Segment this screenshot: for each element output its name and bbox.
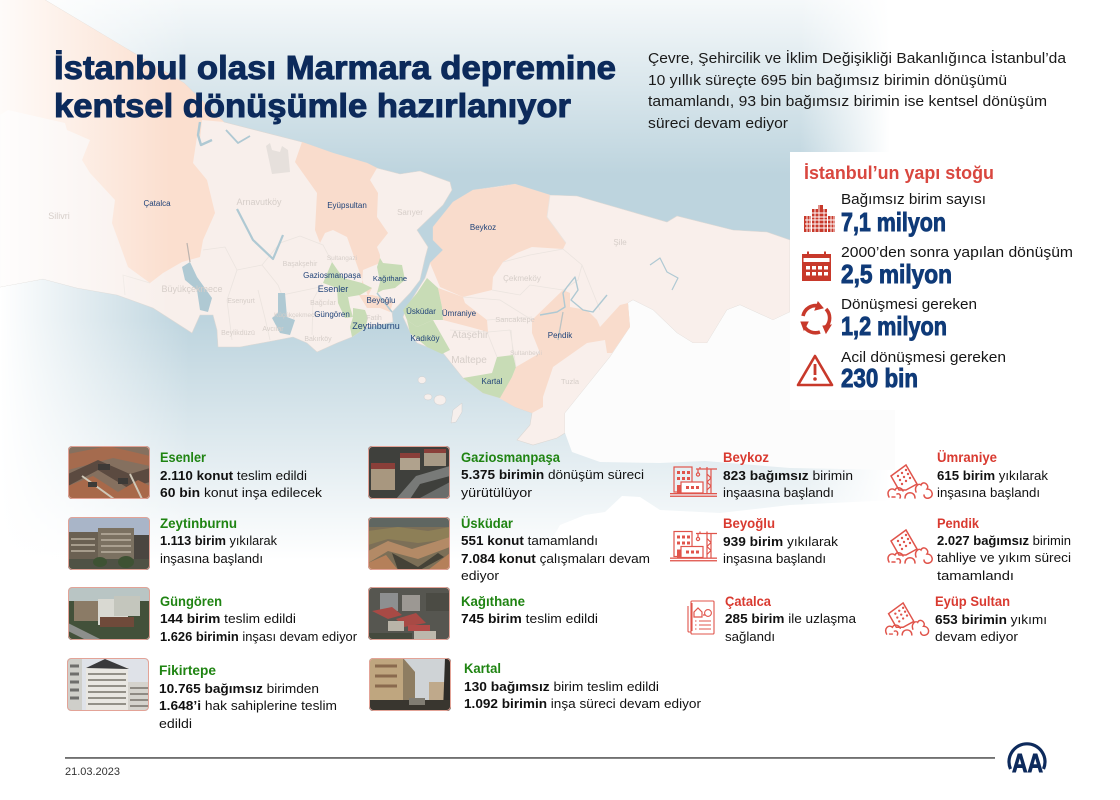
map: grey district labels: Sultangazi bbox=[327, 255, 357, 262]
map: Terkos silhouette bbox=[266, 143, 290, 174]
text: Beyoğlu: 939 birim yıkılarak bbox=[723, 534, 839, 549]
text: Kartal: 1.092 birimin inşa süreci devam ediyor bbox=[464, 696, 702, 711]
map: lakes and water bbox=[182, 262, 462, 423]
text: Kağıthane: Kağıthane bbox=[461, 594, 525, 609]
text: Fikirtepe: Fikirtepe bbox=[159, 663, 216, 678]
map: Asian side land bbox=[403, 184, 790, 445]
text: Çatalca: Çatalca bbox=[725, 594, 771, 609]
stat: dönüşmesi gereken bbox=[841, 297, 977, 341]
map: highlighted district labels: Pendik bbox=[548, 331, 573, 340]
map: grey district labels: Tuzla bbox=[561, 377, 580, 386]
stat: 2000'den sonra yapılan dönüşüm: 2,5 milyon bbox=[841, 259, 952, 289]
map: grey district labels: Sancaktepe bbox=[495, 315, 535, 324]
map: grey district labels: Maltepe bbox=[451, 355, 487, 366]
icon: collapsed building Eyüp Sultan bbox=[886, 603, 929, 635]
text: Kartal: 130 bağımsız birim teslim edildi bbox=[464, 679, 659, 694]
panel: İstanbul'un yapı stoğu bbox=[790, 152, 1090, 410]
text: Zeytinburnu: inşasına başlandı bbox=[160, 551, 263, 566]
stat: bağımsız birim sayısı: 7,1 milyon bbox=[841, 207, 946, 237]
icon: warning triangle bbox=[798, 356, 832, 385]
text: Pendik bbox=[937, 516, 1071, 583]
map: highlighted district labels: Gaziosmanpaşa bbox=[303, 271, 361, 280]
text: Esenler: 60 bin konut inşa edilecek bbox=[160, 485, 323, 500]
icon: buildings bbox=[804, 205, 835, 232]
map: highlighted district labels: Eyüpsultan bbox=[327, 201, 367, 210]
text: Beykoz: Beykoz bbox=[723, 450, 769, 465]
text: Eyüp Sultan bbox=[935, 594, 1047, 644]
intro text block: Çevre, Şehircilik ve İklim Değişikliği Bakanlığınca İstanbul’da bbox=[648, 49, 1067, 67]
text: Pendik: Pendik bbox=[937, 516, 979, 531]
map: Beykoz bbox=[430, 184, 566, 297]
map: Istanbul districts bbox=[0, 0, 895, 560]
text: Esenler: Esenler bbox=[160, 450, 207, 465]
map: grey district labels: Bakırköy bbox=[304, 336, 332, 343]
text: Kağıthane: 745 birim teslim edildi bbox=[461, 611, 598, 626]
text: Üsküdar: 7.084 konut çalışmaları devam bbox=[461, 551, 650, 566]
map: Beyoğlu bbox=[359, 295, 393, 312]
map: Pendik bbox=[499, 290, 630, 413]
stat: 2000'den sonra yapılan dönüşüm: 2000’den sonra yapılan dönüşüm bbox=[841, 245, 1073, 261]
date: 21.03.2023 bbox=[65, 766, 120, 778]
map: grey district labels: Başakşehir bbox=[283, 261, 318, 268]
text: Zeytinburnu bbox=[160, 516, 277, 566]
text: Beyoğlu: inşasına başlandı bbox=[723, 551, 826, 566]
map: grey district labels: Bağcılar bbox=[310, 300, 337, 307]
text: Üsküdar: ediyor bbox=[461, 568, 500, 583]
stat: dönüşmesi gereken: Dönüşmesi gereken bbox=[841, 297, 977, 313]
map: highlighted district labels: Güngören bbox=[314, 310, 350, 319]
map: highlighted district labels: Kadıköy bbox=[411, 334, 439, 343]
map: grey district labels: Ataşehir bbox=[452, 330, 489, 341]
map: district borders bbox=[123, 195, 600, 367]
text: Kağıthane bbox=[461, 594, 598, 626]
map: grey district labels: Sarıyer bbox=[397, 208, 423, 217]
map: highlighted district labels: Çatalca bbox=[143, 199, 171, 208]
intro text block: süreci devam ediyor bbox=[648, 116, 788, 132]
text: Eyüp Sultan: 653 birimin yıkımı bbox=[935, 612, 1047, 627]
text: Gaziosmanpaşa bbox=[461, 450, 644, 500]
intro text block bbox=[648, 49, 1067, 132]
map: grey district labels: Esenyurt bbox=[227, 298, 255, 305]
text: Eyüp Sultan: devam ediyor bbox=[935, 629, 1019, 644]
text: Beykoz bbox=[723, 450, 853, 500]
text: Esenler bbox=[160, 450, 323, 500]
title: kentsel dönüşümle hazırlanıyor bbox=[54, 87, 571, 124]
map: highlighted district labels: Beykoz bbox=[470, 223, 496, 232]
text: Eyüp Sultan: Eyüp Sultan bbox=[935, 594, 1010, 609]
map: grey district labels: Beylikdüzü bbox=[221, 330, 255, 337]
map: highlighted district labels bbox=[143, 199, 573, 386]
text: Fikirtepe bbox=[159, 663, 337, 731]
text: Gaziosmanpaşa: yürütülüyor bbox=[461, 485, 533, 500]
map: grey district labels: Silivri bbox=[48, 211, 70, 221]
map: highlighted district labels: Zeytinburnu bbox=[352, 321, 400, 331]
text: Pendik: tamamlandı bbox=[937, 568, 1014, 583]
stat: acil dönüşmesi gereken bbox=[841, 350, 1006, 393]
text: Çatalca: sağlandı bbox=[725, 629, 775, 644]
text: Fikirtepe: edildi bbox=[159, 716, 192, 731]
map: highlighted district labels: Beyoğlu bbox=[367, 296, 395, 305]
text: Beyoğlu: Beyoğlu bbox=[723, 516, 775, 531]
intro text block: 10 yıllık süreçte 695 bin bağımsız birimin dönüşümü bbox=[648, 73, 1007, 89]
title bbox=[54, 49, 616, 124]
text: Pendik: tahliye ve yıkım süreci bbox=[937, 550, 1071, 565]
text: Çatalca: 285 birim ile uzlaşma bbox=[725, 611, 857, 626]
text: Gaziosmanpaşa: 5.375 birimin dönüşüm süreci bbox=[461, 467, 644, 482]
icon: calendar bbox=[802, 252, 831, 281]
map: Çatalca bbox=[0, 0, 224, 283]
map: Kocaeli land north of the gulf bbox=[565, 300, 895, 470]
text: Üsküdar bbox=[461, 516, 650, 583]
map: highlighted district labels: Esenler bbox=[318, 284, 348, 294]
icon: recycle arrows bbox=[801, 302, 831, 333]
stat: acil dönüşmesi gereken: 230 bin bbox=[841, 363, 918, 393]
title: İstanbul olası Marmara depremine bbox=[54, 49, 616, 86]
photo: Esenler bbox=[68, 446, 150, 499]
map: grey district labels: Arnavutköy bbox=[236, 197, 282, 207]
photo: Kağıthane bbox=[368, 587, 450, 640]
map: grey district labels: Çekmeköy bbox=[503, 274, 541, 283]
map: grey district labels: Küçükçekmece bbox=[274, 312, 318, 319]
text: Üsküdar: 551 konut tamamlandı bbox=[461, 533, 598, 548]
text: Fikirtepe: 1.648’i hak sahiplerine teslim bbox=[159, 698, 337, 713]
icon: crane Beyoğlu bbox=[670, 532, 717, 561]
photo: Güngören bbox=[68, 587, 150, 640]
stat: 2000'den sonra yapılan dönüşüm bbox=[841, 245, 1073, 289]
text: Pendik: 2.027 bağımsız birimin bbox=[937, 533, 1071, 548]
text: Zeytinburnu: Zeytinburnu bbox=[160, 516, 237, 531]
photo: Fikirtepe bbox=[67, 658, 149, 711]
map: highlighted district labels: Kartal bbox=[482, 377, 503, 386]
text: Güngören: 144 birim teslim edildi bbox=[160, 611, 296, 626]
text: Güngören bbox=[160, 594, 358, 644]
text: Ümraniye: 615 birim yıkılarak bbox=[937, 468, 1049, 483]
logo: AA: AA bbox=[1012, 748, 1043, 778]
text: Ümraniye bbox=[937, 450, 1049, 500]
text: Kartal bbox=[464, 661, 702, 711]
text: Güngören: Güngören bbox=[160, 594, 222, 609]
text: Fikirtepe: 10.765 bağımsız birimden bbox=[159, 681, 319, 696]
photo: Üsküdar bbox=[368, 517, 450, 570]
stat: bağımsız birim sayısı bbox=[841, 192, 986, 237]
text: Gaziosmanpaşa: Gaziosmanpaşa bbox=[461, 450, 560, 465]
map: land left fade bbox=[0, 0, 136, 295]
icon: collapsed building Ümraniye bbox=[888, 465, 932, 498]
text: Çatalca bbox=[725, 594, 857, 644]
icon: collapsed building Pendik bbox=[888, 530, 932, 563]
text: Kartal: Kartal bbox=[464, 661, 501, 676]
stat: acil dönüşmesi gereken: Acil dönüşmesi gereken bbox=[841, 350, 1006, 366]
map: highlighted district labels: Üsküdar bbox=[406, 307, 436, 316]
stat: bağımsız birim sayısı: Bağımsız birim sayısı bbox=[841, 192, 986, 208]
panel heading: İstanbul’un yapı stoğu bbox=[804, 163, 994, 183]
map: grey district labels: Sultanbeyli bbox=[510, 350, 542, 357]
map: grey district labels: Fatih bbox=[366, 315, 382, 322]
stat: dönüşmesi gereken: 1,2 milyon bbox=[841, 311, 947, 341]
icon: document Çatalca bbox=[688, 601, 714, 634]
map: green districts bbox=[323, 258, 516, 398]
map: grey district labels: Avcılar bbox=[262, 326, 284, 333]
map: grey district labels bbox=[48, 197, 627, 386]
map: Ümraniye bbox=[438, 288, 488, 332]
icon: crane Beykoz bbox=[670, 467, 717, 497]
text: Esenler: 2.110 konut teslim edildi bbox=[160, 468, 307, 483]
text: Zeytinburnu: 1.113 birim yıkılarak bbox=[160, 533, 277, 548]
map: grey district labels: Şile bbox=[613, 238, 627, 247]
text: Üsküdar: Üsküdar bbox=[461, 516, 514, 531]
text: Ümraniye: Ümraniye bbox=[937, 450, 997, 465]
map: grey district labels: Büyükçekmece bbox=[161, 284, 223, 294]
map: highlighted district labels: Kağıthane bbox=[373, 274, 407, 283]
photo: Gaziosmanpaşa bbox=[368, 446, 450, 499]
footer rule bbox=[65, 757, 995, 759]
text: Beykoz: 823 bağımsız birimin bbox=[723, 468, 853, 483]
photo: Zeytinburnu bbox=[68, 517, 150, 570]
map: highlighted district labels: Ümraniye bbox=[442, 309, 477, 318]
text: Beyoğlu bbox=[723, 516, 839, 566]
photo: Kartal bbox=[369, 658, 451, 711]
map: Eyüpsultan bbox=[295, 142, 388, 296]
text: Güngören: 1.626 birimin inşası devam ediyor bbox=[160, 629, 358, 644]
text: Ümraniye: inşasına başlandı bbox=[937, 485, 1040, 500]
map: land south of the gulf bbox=[540, 496, 895, 560]
intro text block: tamamlandı, 93 bin bağımsız birimin ise kentsel dönüşüm bbox=[648, 94, 1047, 110]
map: European side land bbox=[0, 0, 452, 352]
text: Beykoz: inşaasına başlandı bbox=[723, 485, 834, 500]
